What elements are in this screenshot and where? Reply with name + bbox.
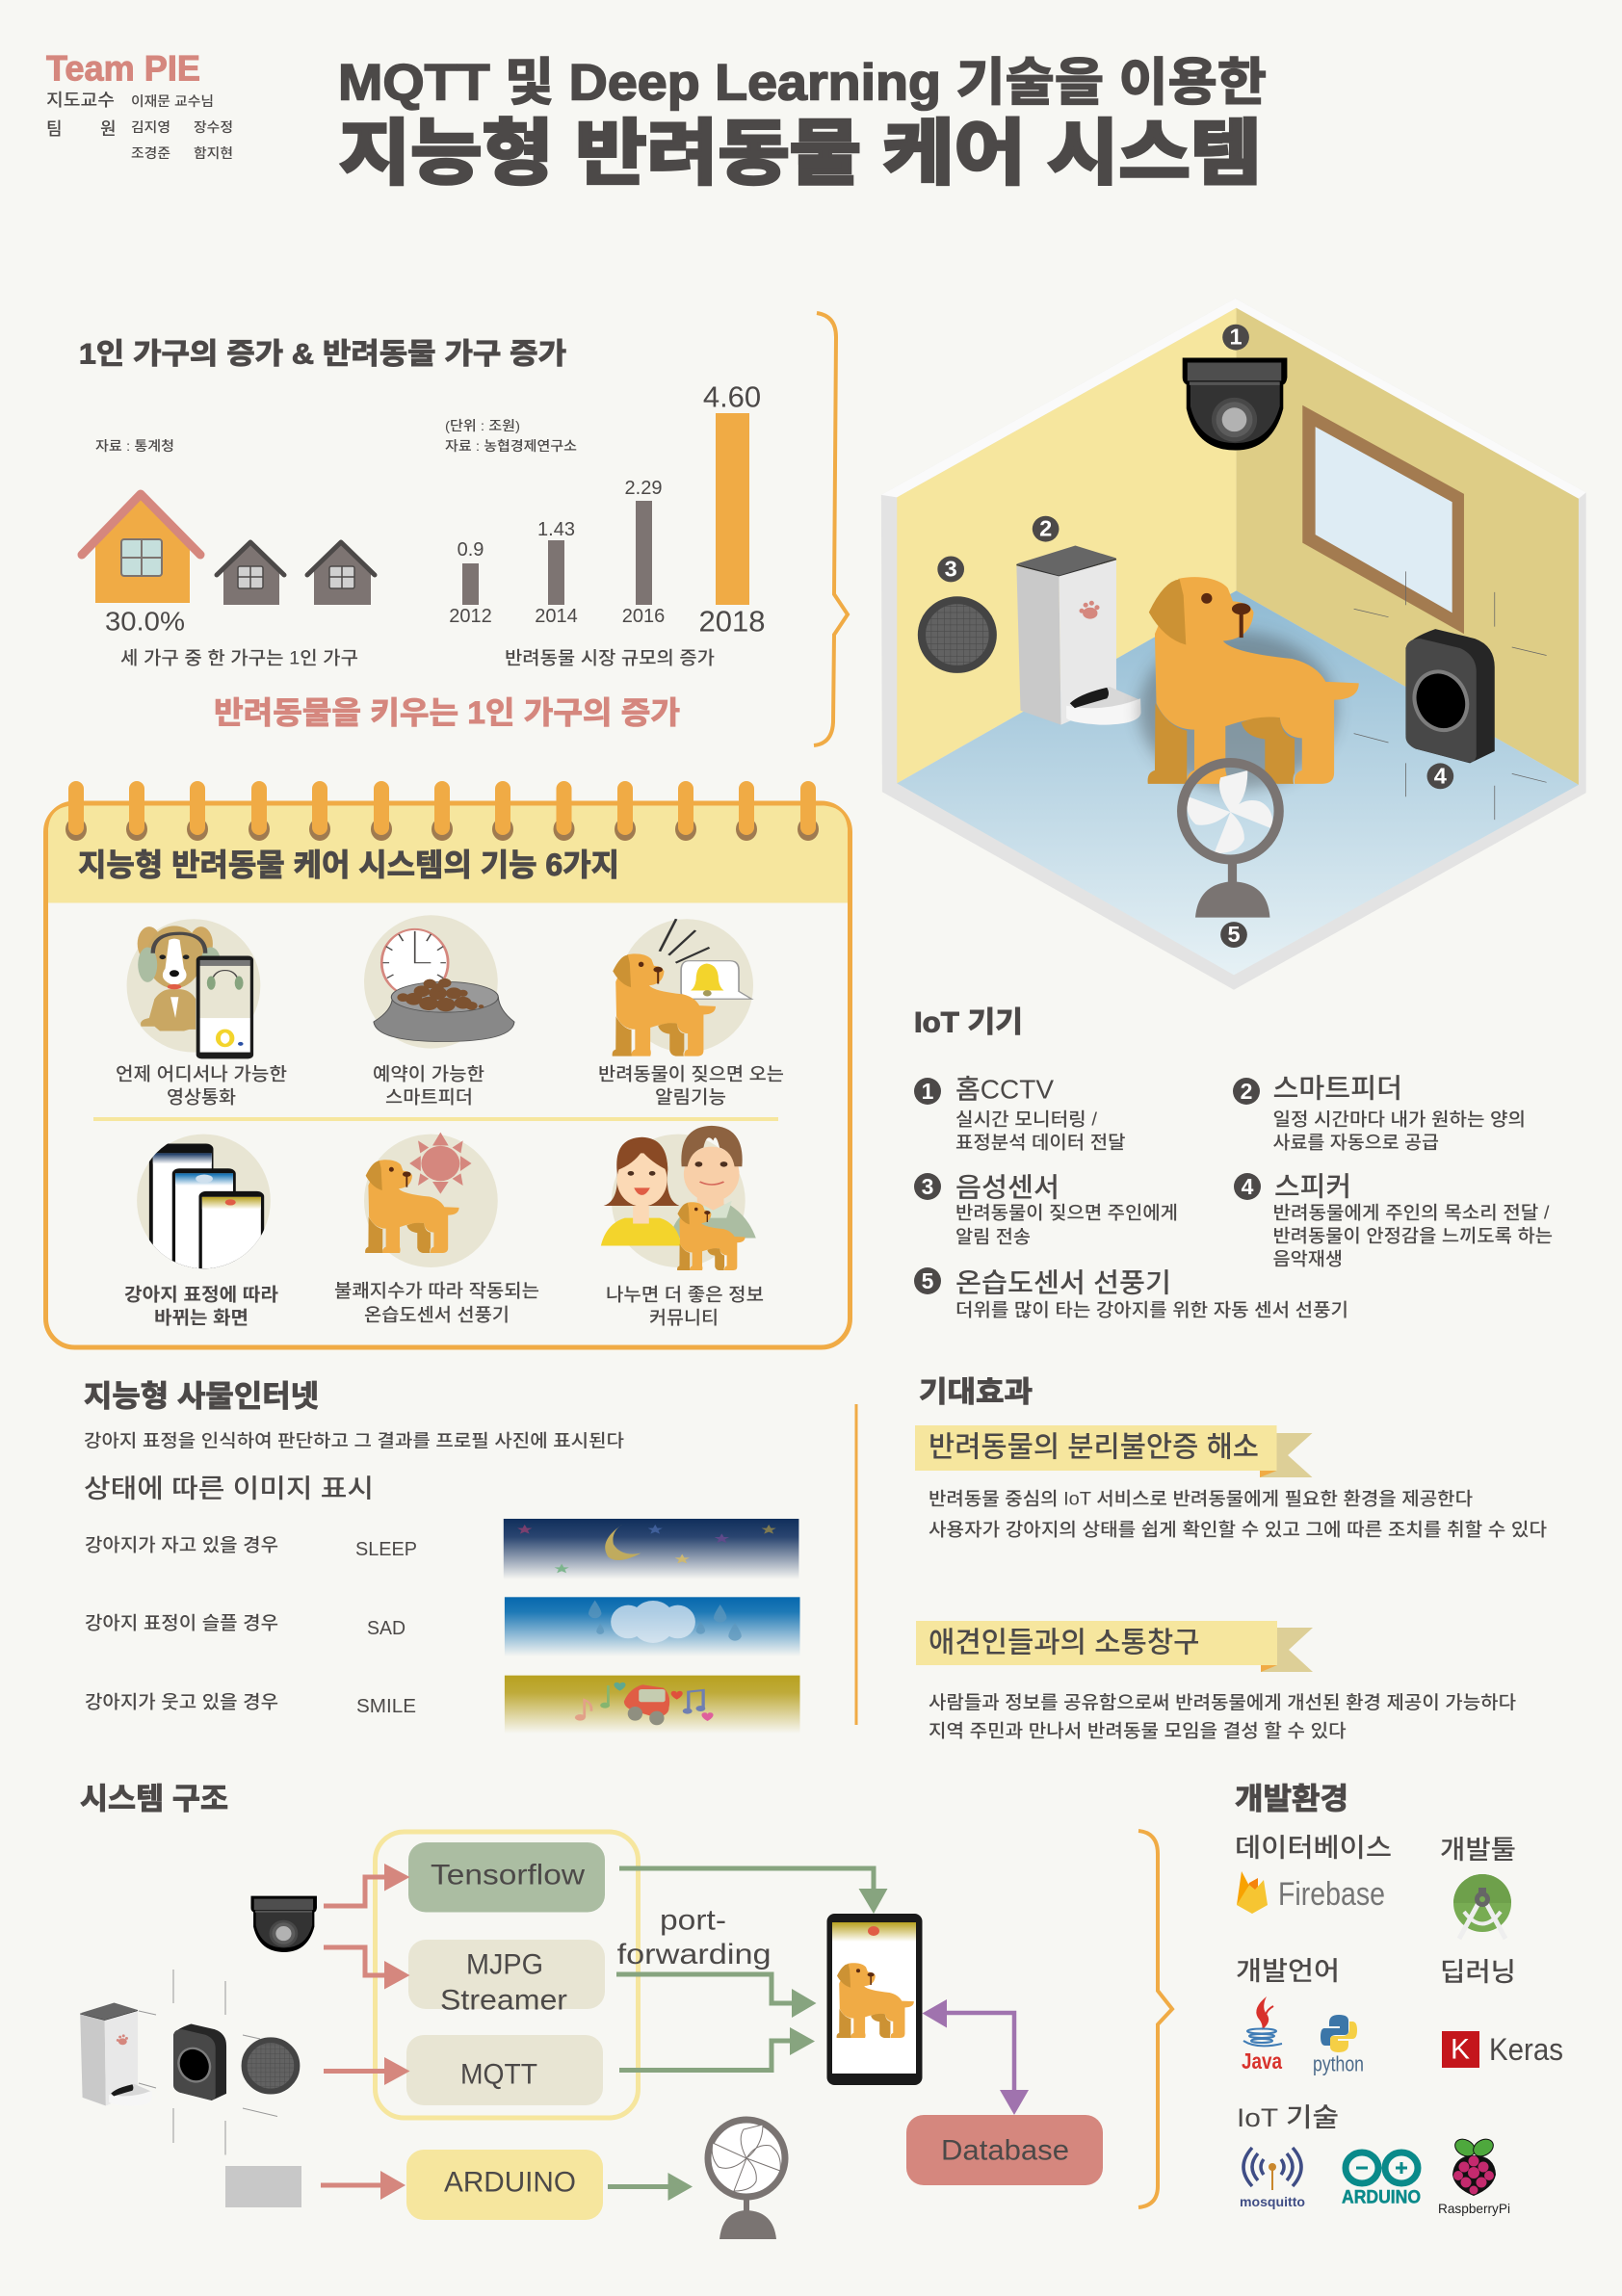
number markers [937, 325, 1453, 948]
bar chart: pet market size: 1.43 [537, 519, 575, 540]
item 1: 홈CCTV [955, 1075, 1054, 1105]
team members: 장수정 [194, 119, 233, 135]
source note: market: (단위 : 조원) [445, 418, 520, 433]
box: MJPG Streamer: Streamer [440, 1985, 567, 2017]
item 2: 스마트피더 [1273, 1074, 1402, 1104]
heading: 지능형 사물인터넷 [84, 1380, 319, 1414]
arrow: camera to MJPG [324, 1947, 410, 1990]
ribbon 2: 애견인들과의 소통창구 [929, 1628, 1200, 1659]
source note: market [445, 418, 577, 454]
heading: 시스템 구조 [80, 1783, 228, 1816]
logo: Firebase: Firebase [1278, 1876, 1385, 1913]
caption: video call: 영상통화 [167, 1087, 236, 1109]
logo: mosquitto [1240, 2148, 1305, 2209]
logo: Raspberry Pi: RaspberryPi [1438, 2201, 1510, 2216]
logo: Java: Java [1242, 2048, 1282, 2074]
item 5: 온습도센서 선풍기 [955, 1268, 1171, 1298]
divider [855, 1404, 857, 1725]
heading: 지능형 반려동물 케어 시스템의 기능 6가지 [78, 848, 619, 882]
caption: screens: 바뀌는 화면 [154, 1308, 249, 1329]
label: port forwarding [617, 1905, 772, 1970]
dog [1148, 577, 1359, 784]
calendar header [48, 805, 848, 903]
item 3: 알림 전송 [955, 1227, 1031, 1248]
team credits [46, 49, 233, 161]
panel: six functions calendar [46, 781, 850, 1347]
box: Tensorflow [408, 1842, 605, 1913]
team name: Team PIE [46, 49, 200, 89]
caption: fan: 온습도센서 선풍기 [364, 1305, 510, 1326]
effect text 1: 반려동물 중심의 IoT 서비스로 반려동물에게 필요한 환경을 제공한다 [929, 1489, 1474, 1510]
label: database: 데이터베이스 [1235, 1834, 1392, 1863]
row: sleep: 강아지가 자고 있을 경우 [85, 1535, 278, 1556]
icon: fan [1182, 763, 1279, 918]
panel: intelligent IoT [84, 1380, 800, 1734]
row: sleep [85, 1535, 417, 1560]
function icon: sensor fan [364, 1133, 498, 1267]
number markers: 4 [1434, 764, 1447, 788]
effect text 1: 사용자가 강아지의 상태를 쉽게 확인할 수 있고 그에 따른 조치를 취할 수 있다 [929, 1520, 1548, 1541]
item 1: 실시간 모니터링 / [955, 1109, 1098, 1131]
bar chart: pet market size: 0.9 [458, 539, 484, 561]
heading: IoT 기기 [914, 1007, 1023, 1039]
effect text 2: 사람들과 정보를 공유함으로써 반려동물에게 개선된 환경 제공이 가능하다 [929, 1692, 1517, 1713]
panel: system architecture [80, 1783, 1103, 2239]
bracket: development environment [1138, 1831, 1172, 2207]
arrow: phone and database [923, 1999, 1029, 2115]
title: 지능형 반려동물 케어 시스템 [339, 114, 1262, 194]
number markers: 3 [945, 557, 957, 581]
title [338, 55, 1267, 194]
arrow: Arduino to fan [608, 2173, 693, 2201]
logo: Arduino: ARDUINO [1342, 2188, 1421, 2208]
label: port forwarding: forwarding [617, 1939, 772, 1970]
effect text 2 [929, 1692, 1517, 1742]
function icon: scheduled feeder [364, 915, 514, 1049]
logo: Android Studio [1453, 1874, 1511, 1939]
logo: Raspberry Pi [1438, 2136, 1510, 2216]
team members: 조경준 [131, 145, 170, 161]
ribbon 1: 반려동물의 분리불안증 해소 [929, 1432, 1259, 1464]
icon: highlighted house [82, 494, 200, 603]
number markers: 5 [1227, 922, 1241, 947]
bar chart: pet market size: 2.29 [625, 478, 662, 499]
logo: Python [1313, 2015, 1364, 2076]
source note: market: 자료 : 농협경제연구소 [445, 438, 577, 454]
callout: 반려동물을 키우는 1인 가구의 증가 [214, 695, 680, 730]
item 5: 더위를 많이 타는 강아지를 위한 자동 센서 선풍기 [955, 1300, 1348, 1321]
caption: households: 세 가구 중 한 가구는 1인 가구 [120, 648, 358, 669]
item 1: 표정분석 데이터 전달 [955, 1133, 1125, 1154]
label: languages: 개발언어 [1236, 1957, 1340, 1986]
label: deep learning: 딥러닝 [1440, 1958, 1516, 1987]
box: Database [906, 2115, 1103, 2185]
row: smile [85, 1692, 416, 1717]
item 4: 반려동물이 안정감을 느끼도록 하는 [1273, 1226, 1553, 1247]
box: Tensorflow: Tensorflow [431, 1860, 585, 1892]
box: MQTT: MQTT [460, 2059, 537, 2091]
arrow: camera to Tensorflow [324, 1864, 410, 1906]
team members [46, 91, 233, 161]
icon: speaker [173, 2024, 226, 2100]
ribbon 2 [916, 1621, 1313, 1672]
team members: 원 [100, 119, 117, 139]
caption: feeder [373, 1064, 484, 1109]
title: MQTT 및 Deep Learning 기술을 이용한 [338, 55, 1267, 112]
caption: community: 커뮤니티 [649, 1308, 719, 1329]
dog shadow [1139, 632, 1337, 790]
team members: 김지영 [131, 119, 170, 135]
number markers [914, 1078, 1261, 1294]
caption: community [606, 1285, 764, 1329]
box: MQTT [406, 2035, 603, 2105]
source note: 자료 : 통계청 [95, 438, 174, 454]
icon: camera [250, 1896, 317, 1952]
icon: house [217, 542, 284, 605]
caption: market: 반려동물 시장 규모의 증가 [505, 648, 715, 669]
item 2: 사료를 자동으로 공급 [1273, 1133, 1439, 1154]
caption: screens [124, 1285, 279, 1329]
row: sad [85, 1613, 406, 1639]
icon: phone [826, 1914, 923, 2085]
team members: 팀 [46, 119, 63, 139]
item 1 [955, 1075, 1125, 1154]
label: port forwarding: port- [660, 1905, 726, 1937]
caption: community: 나누면 더 좋은 정보 [606, 1285, 764, 1306]
item 3 [955, 1173, 1178, 1248]
number markers: 5 [922, 1268, 934, 1293]
icon: fan [708, 2120, 785, 2239]
arrow: sensors to MQTT [324, 2057, 410, 2085]
box: MJPG Streamer: MJPG [466, 1949, 543, 1981]
icon: cctv camera [1183, 358, 1287, 451]
logo: Arduino [1342, 2152, 1421, 2208]
icon: speaker [1405, 629, 1495, 763]
item 4: 스피커 [1274, 1172, 1351, 1202]
box: Database: Database [941, 2135, 1069, 2167]
function icon: bark alert [613, 919, 753, 1057]
heading: 1인 가구의 증가 & 반려동물 가구 증가 [79, 339, 566, 371]
temperature sensor placeholder [225, 2166, 301, 2207]
bar chart: pet market size: 2018 [699, 605, 765, 639]
caption: feeder: 예약이 가능한 [373, 1064, 484, 1085]
sleep image [504, 1519, 798, 1579]
smile image [505, 1676, 800, 1734]
item 4: 반려동물에게 주인의 목소리 전달 / [1273, 1203, 1550, 1224]
caption: video call: 언제 어디서나 가능한 [116, 1064, 287, 1085]
item 2: 일정 시간마다 내가 원하는 양의 [1273, 1109, 1526, 1131]
logo: Keras [1442, 2031, 1563, 2068]
bar chart: pet market size [449, 380, 765, 639]
ribbon 1 [915, 1425, 1312, 1477]
label: dev tools: 개발툴 [1440, 1836, 1516, 1865]
bar chart: pet market size: 2012 [449, 606, 492, 627]
effect text 1 [929, 1489, 1548, 1541]
panel: IoT devices [914, 1007, 1553, 1321]
arrow: MJPG to phone [616, 1974, 817, 2018]
illustration: smart pet room [881, 299, 1586, 990]
icon: smart feeder [1016, 546, 1141, 725]
caption: fan [334, 1281, 539, 1326]
caption: video call [116, 1064, 287, 1109]
30 percent label: 30.0% [105, 607, 185, 637]
server group frame [376, 1832, 638, 2118]
panel: development environment [1235, 1783, 1563, 2216]
icon: sound sensor [922, 600, 993, 669]
item 4 [1273, 1172, 1553, 1270]
caption: feeder: 스마트피더 [385, 1087, 473, 1109]
caption: alert [598, 1064, 784, 1109]
heading: 개발환경 [1235, 1783, 1348, 1816]
window [1302, 405, 1464, 634]
item 4: 음악재생 [1273, 1249, 1343, 1270]
function icon: expression screens [137, 1135, 271, 1283]
item 5 [955, 1268, 1348, 1321]
panel: expected effects [915, 1377, 1548, 1742]
item 3: 음성센서 [955, 1173, 1060, 1203]
team members: 이재문 교수님 [131, 93, 214, 109]
number markers: 1 [922, 1079, 934, 1104]
description: 강아지 표정을 인식하여 판단하고 그 결과를 프로필 사진에 표시된다 [84, 1431, 624, 1451]
number markers: 2 [1241, 1079, 1252, 1104]
box: Arduino [406, 2150, 603, 2220]
arrow: sensor to Arduino [321, 2171, 406, 2200]
bar chart: pet market size: 2016 [622, 606, 665, 627]
caption: alert: 반려동물이 짖으면 오는 [598, 1064, 784, 1085]
number markers: 4 [1242, 1174, 1254, 1199]
box: MJPG Streamer [408, 1940, 605, 2017]
function icon: video call [127, 919, 260, 1058]
label: IoT tech: IoT 기술 [1237, 2103, 1339, 2132]
heading: 기대효과 [919, 1377, 1033, 1409]
number markers: 2 [1039, 516, 1052, 541]
icon: house [307, 542, 375, 605]
sad image [505, 1597, 800, 1657]
icon: feeder [80, 2003, 152, 2105]
calendar rings [65, 781, 819, 841]
number markers: 3 [922, 1174, 933, 1199]
logo: Keras: K [1451, 2034, 1470, 2066]
effect text 2: 지역 주민과 만나서 반려동물 모임을 결성 할 수 있다 [929, 1721, 1347, 1742]
function icon: community [601, 1126, 756, 1270]
row: smile: SMILE [356, 1696, 416, 1717]
bar chart: pet market size: 4.60 [703, 380, 761, 414]
row: smile: 강아지가 웃고 있을 경우 [85, 1692, 278, 1713]
logo: Java [1242, 1996, 1282, 2074]
logo: Firebase [1237, 1871, 1385, 1914]
logo: Python: python [1313, 2052, 1364, 2076]
arrow: MQTT to phone [619, 2027, 815, 2071]
logo: Keras: Keras [1489, 2032, 1563, 2067]
caption: alert: 알림기능 [655, 1087, 726, 1109]
icon: sound sensor [245, 2040, 297, 2092]
panel: background statistics [79, 339, 765, 730]
bar chart: pet market size: 2014 [535, 606, 578, 627]
bracket: to room [814, 313, 848, 745]
number markers: 1 [1230, 325, 1243, 350]
subheading: 상태에 따른 이미지 표시 [84, 1474, 374, 1503]
arrow: Tensorflow to phone [619, 1868, 888, 1914]
row: sad: 강아지 표정이 슬플 경우 [85, 1613, 278, 1634]
logo: mosquitto: mosquitto [1240, 2194, 1305, 2209]
caption: fan: 불쾌지수가 따라 작동되는 [334, 1281, 539, 1302]
item 3: 반려동물이 짖으면 주인에게 [955, 1203, 1178, 1224]
box: Arduino: ARDUINO [444, 2167, 576, 2199]
calendar body [46, 803, 850, 1347]
item 2 [1273, 1074, 1526, 1154]
team members: 함지현 [194, 145, 233, 161]
row: sad: SAD [367, 1618, 406, 1639]
team members: 지도교수 [46, 91, 115, 110]
caption: screens: 강아지 표정에 따라 [124, 1285, 279, 1306]
row: sleep: SLEEP [355, 1539, 417, 1560]
